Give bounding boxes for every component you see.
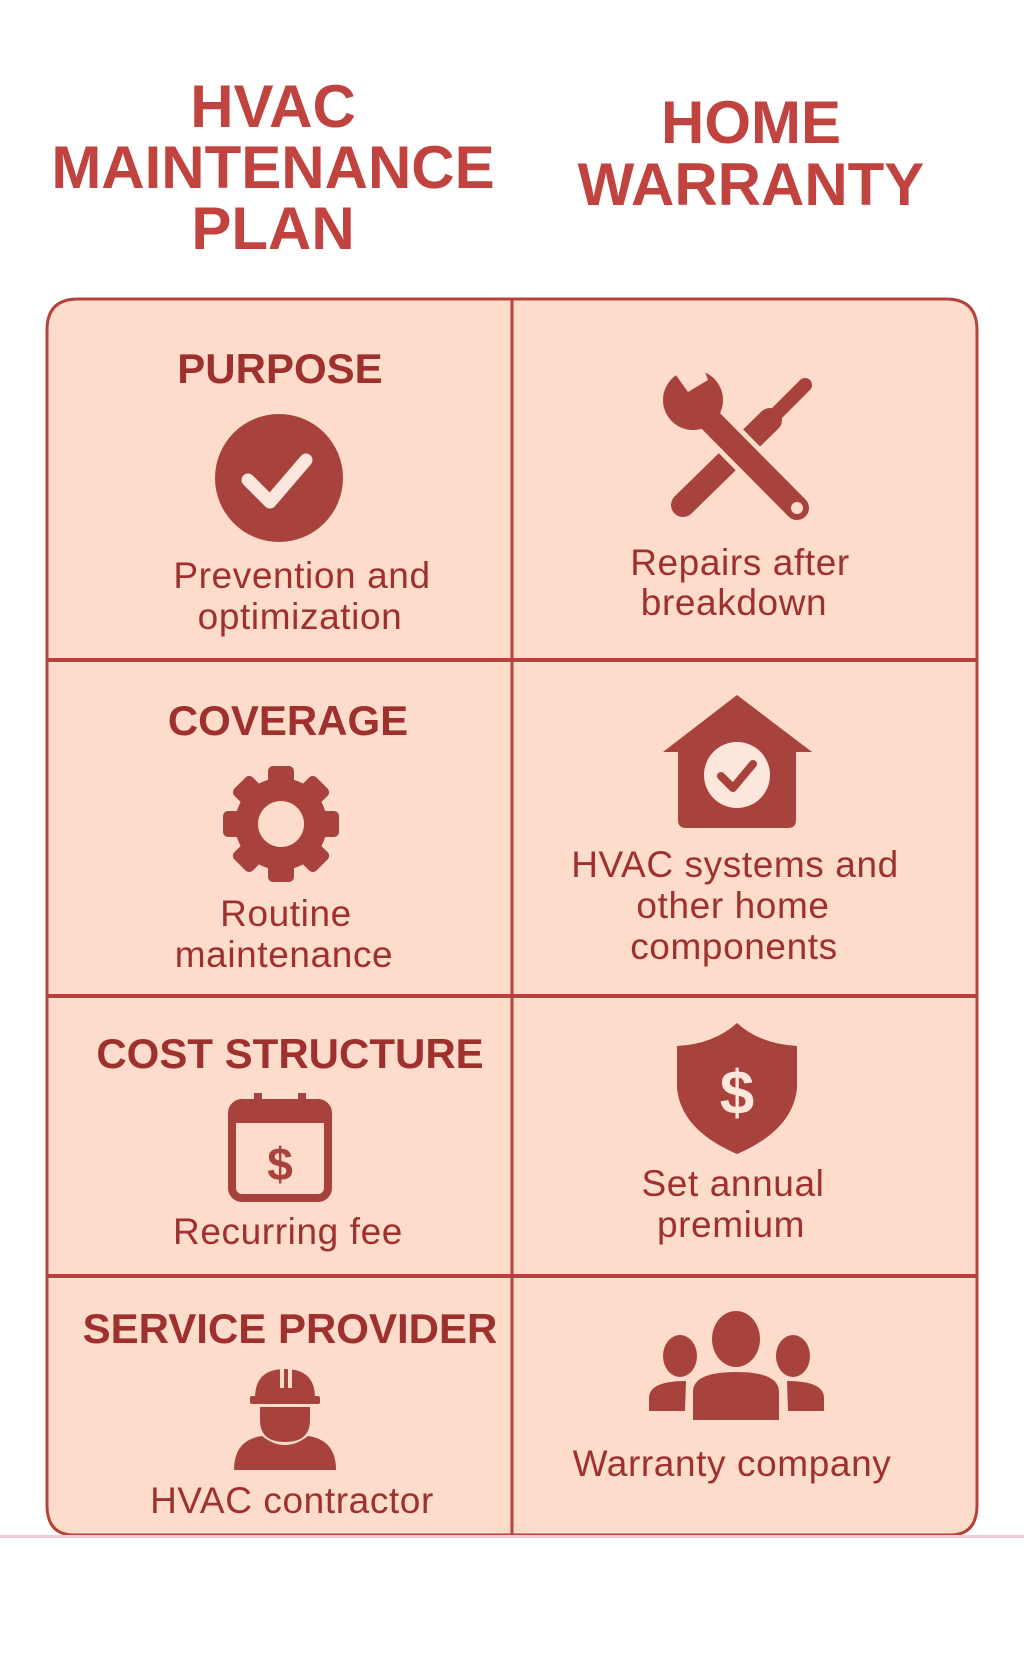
cell: set annual premium: premium	[657, 1204, 805, 1245]
cell: repairs after breakdown: Repairs after	[630, 542, 850, 583]
cell: service provider	[83, 1305, 497, 1521]
title: HVAC maintenance plan: HVAC	[190, 73, 356, 140]
cell: service provider: SERVICE PROVIDER	[83, 1305, 497, 1352]
cell: purpose	[173, 345, 431, 637]
cell: repairs after breakdown	[630, 358, 850, 623]
icon: group of people	[649, 1311, 824, 1420]
title: home warranty: HOME	[661, 89, 841, 156]
pink baseline line	[0, 1535, 1024, 1538]
cell: repairs after breakdown: breakdown	[641, 582, 827, 623]
cell: warranty company	[573, 1311, 891, 1484]
icon: calendar with dollar: $	[267, 1138, 293, 1190]
cell: HVAC systems and other home components	[571, 695, 899, 967]
cell: HVAC systems and other home components: HVAC systems and	[571, 844, 899, 885]
title: home warranty: WARRANTY	[578, 151, 924, 218]
icon: worker with hard hat	[234, 1368, 336, 1470]
icon: wrench and screwdriver	[663, 358, 805, 514]
icon: shield with dollar: $	[720, 1059, 754, 1128]
cell: service provider: HVAC contractor	[150, 1480, 434, 1521]
cell: coverage: Routine	[220, 893, 352, 934]
cell: HVAC systems and other home components: components	[630, 926, 838, 967]
icon: gear	[223, 766, 339, 882]
cell: coverage: maintenance	[175, 934, 393, 975]
cell: purpose: Prevention and	[173, 555, 431, 596]
title: HVAC maintenance plan: MAINTENANCE	[51, 134, 495, 201]
cell: coverage	[168, 697, 408, 975]
cell: purpose: PURPOSE	[177, 345, 383, 392]
cell: set annual premium	[642, 1023, 824, 1245]
icon: calendar with dollar	[232, 1093, 328, 1198]
cell: coverage: COVERAGE	[168, 697, 408, 744]
cell: cost structure	[96, 1030, 484, 1252]
cell: HVAC systems and other home components: other home	[636, 885, 830, 926]
title: home warranty	[578, 89, 924, 218]
title: HVAC maintenance plan: PLAN	[191, 195, 355, 262]
title: HVAC maintenance plan	[51, 73, 495, 262]
icon: house with check	[663, 695, 812, 828]
cell: cost structure: COST STRUCTURE	[96, 1030, 484, 1077]
cell: purpose: optimization	[198, 596, 402, 637]
comparison table	[47, 299, 977, 1535]
cell: warranty company: Warranty company	[573, 1443, 891, 1484]
icon: check circle	[215, 414, 343, 542]
icon: shield with dollar	[677, 1023, 797, 1154]
cell: set annual premium: Set annual	[642, 1163, 824, 1204]
cell: cost structure: Recurring fee	[173, 1211, 403, 1252]
